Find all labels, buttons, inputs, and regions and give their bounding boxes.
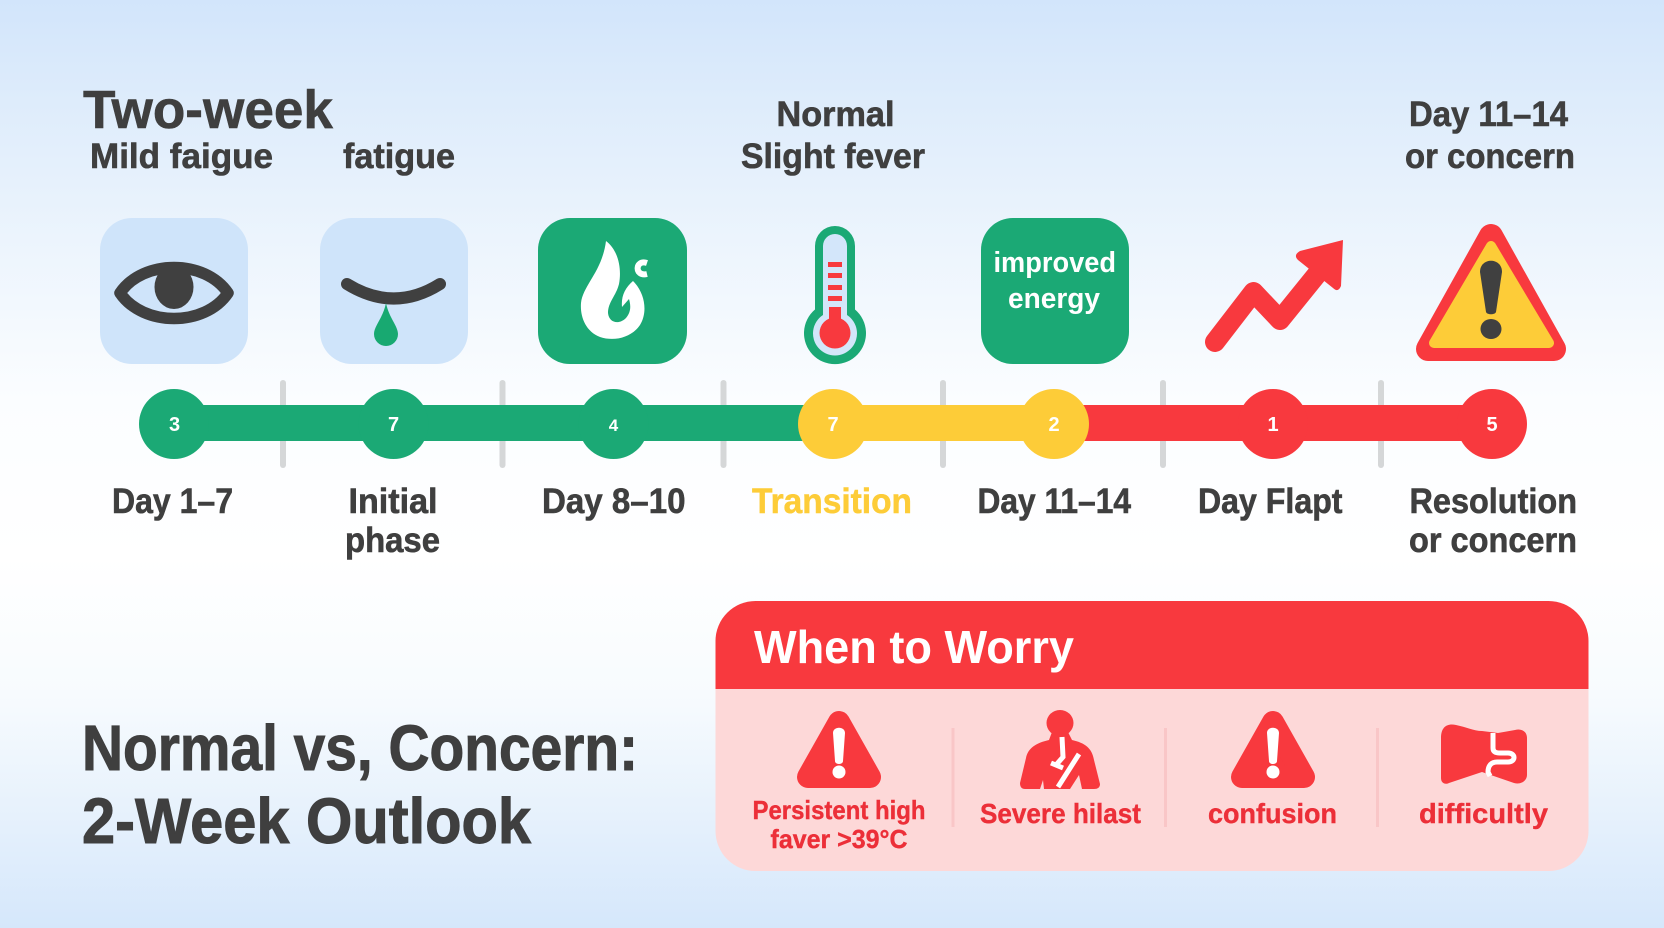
main title [82,712,638,857]
panel heading: When to Worry: When to Worry [754,621,1074,673]
text: persistent high fever [752,795,926,854]
timeline label: Day 11-14: Day 11–14 [978,482,1131,521]
timeline: 2 [1048,414,1060,436]
icon: thermometer [804,226,866,364]
icon: closed eye with tear card [320,218,468,364]
icon: improved energy card [981,218,1129,364]
timeline label: Day Flapt: Day Flapt [1198,482,1343,521]
top label: Day 11-14 or concern: or concern [1405,137,1575,176]
icon: person chest pain [1020,710,1100,789]
timeline label: Initial phase: phase [345,521,440,560]
panel header [716,601,1588,689]
icon: warning triangle [1428,236,1554,349]
top label: Day 11-14 or concern [1405,95,1575,176]
text: severe hilast: Severe hilast [980,798,1141,829]
timeline: 7 [827,414,839,436]
top heading: Two-week: Two-week [83,80,334,140]
main title: Normal vs, Concern: [82,712,638,784]
timeline: 3 [169,414,180,436]
top label: Normal Slight fever: Normal [776,95,894,134]
timeline label: Resolution or concern: or concern [1409,521,1577,560]
icon: lungs [1441,725,1527,784]
icon: rising arrow [1215,240,1343,342]
text: persistent high fever: faver >39°C [770,824,908,854]
main title: 2-Week Outlook [82,785,531,857]
icon: warning confusion [1242,722,1304,778]
timeline: 1 [1267,414,1279,436]
timeline label: Day 1-7: Day 1–7 [112,482,233,521]
timeline: 4 [609,416,619,435]
text: persistent high fever: Persistent high [752,795,926,825]
timeline label: Transition: Transition [752,482,912,521]
icon: improved energy card: energy [1008,283,1100,315]
top label: Mild faigue: Mild faigue [90,137,273,176]
timeline label: Day 8-10: Day 8–10 [542,482,686,521]
timeline label: Resolution or concern: Resolution [1410,482,1577,521]
text: confusion: confusion [1208,798,1337,829]
timeline: 7 [388,414,399,436]
timeline label: Initial phase [345,482,440,560]
text: difficultly: difficultly [1419,798,1548,829]
icon: eye card [100,218,248,364]
icon: improved energy card: improved [994,247,1116,279]
timeline label: Resolution or concern [1409,482,1577,560]
icon: warning fever [808,722,870,778]
timeline: 5 [1486,414,1498,436]
top label: Normal Slight fever: Slight fever [741,137,925,176]
timeline [139,380,1527,468]
timeline label: Initial phase: Initial [348,482,438,521]
dividers [952,728,1379,827]
top label: Day 11-14 or concern: Day 11–14 [1409,95,1569,134]
panel: when to worry [716,601,1588,871]
top label: Normal Slight fever [741,95,925,176]
icon: flame hook card [538,218,687,364]
top label: fatigue: fatigue [343,137,455,176]
